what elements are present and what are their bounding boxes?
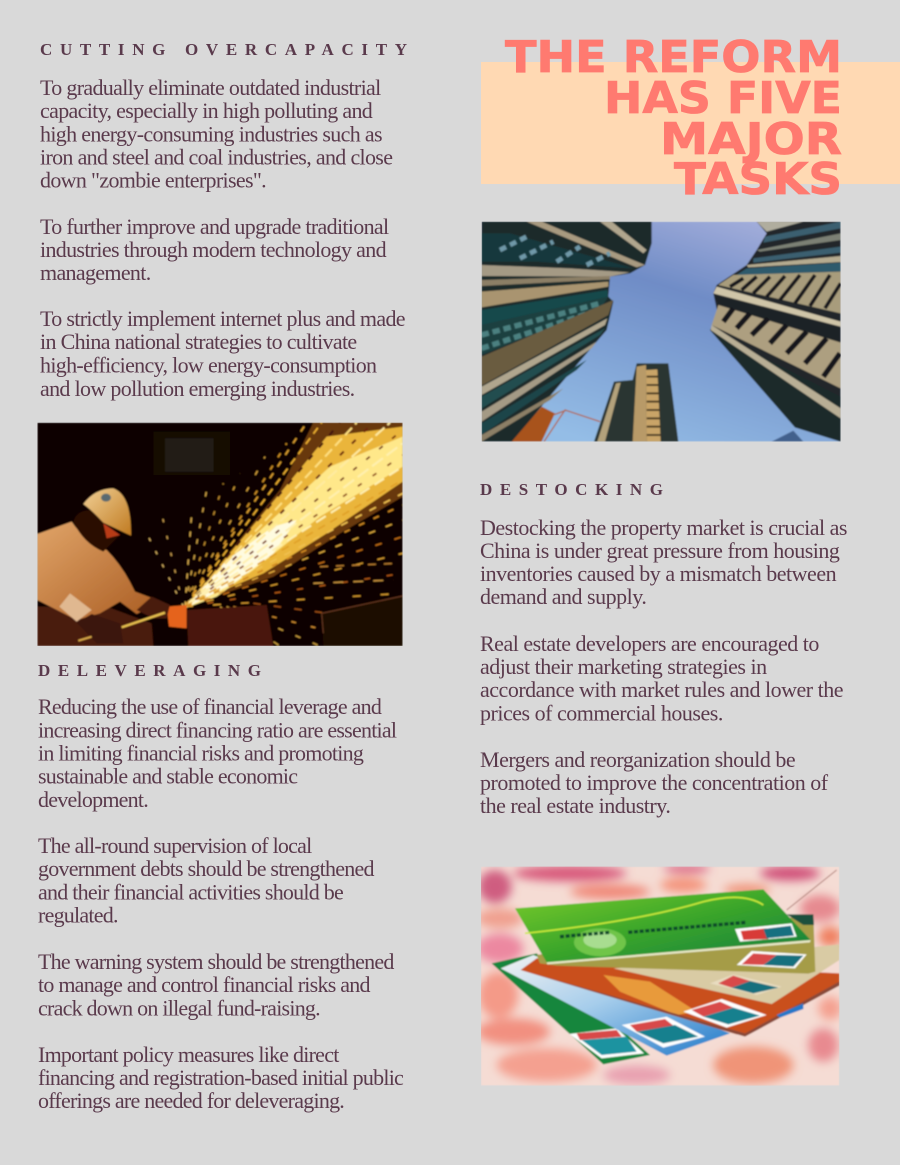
heading: cutting overcapacity: CUTTING OVERCAPACITY: [40, 40, 407, 59]
photo: bank cards on banknotes: [477, 865, 842, 1086]
text block: deleveraging: and their financial activities should be: [38, 880, 343, 904]
text block: deleveraging: regulated.: [38, 902, 118, 928]
text block: deleveraging: The warning system should be strengthened: [38, 949, 394, 974]
text block: cutting overcapacity: high energy-consuming industries such as: [40, 122, 382, 146]
text block: destocking: promoted to improve the concentration of: [480, 770, 829, 795]
text block: destocking: demand and supply.: [480, 584, 646, 609]
worker: [37, 488, 170, 646]
text block: cutting overcapacity: in China national strategies to cultivate: [40, 329, 356, 354]
photo: towers from below: [482, 222, 841, 442]
text block: deleveraging: financing and registration-based initial public: [38, 1065, 404, 1090]
text block: deleveraging: Reducing the use of financial leverage and: [38, 694, 382, 719]
text block: destocking: prices of commercial houses.: [480, 700, 723, 726]
text block: destocking: China is under great pressure from housing: [480, 538, 840, 563]
green card: [492, 953, 650, 1064]
text block: cutting overcapacity: To strictly implement internet plus and made: [40, 306, 405, 331]
text block: deleveraging: development.: [38, 787, 148, 812]
text block: cutting overcapacity: down "zombie enterprises".: [40, 168, 266, 192]
text block: deleveraging: [38, 694, 404, 1113]
photo: worker with sparks: [37, 423, 403, 646]
section: destocking: [480, 480, 847, 818]
text block: cutting overcapacity: To gradually eliminate outdated industrial: [40, 75, 381, 100]
left towers: [482, 222, 652, 442]
text block: deleveraging: sustainable and stable economic: [38, 764, 298, 788]
title text: [505, 32, 842, 205]
text block: destocking: [480, 515, 847, 818]
text block: deleveraging: The all-round supervision of local: [38, 833, 312, 858]
beige card: [613, 944, 839, 1004]
banner rectangle: [481, 62, 900, 184]
text block: destocking: accordance with market rules and lower the: [480, 677, 843, 702]
red card: [521, 958, 839, 1037]
title text: THE REFORM: [505, 32, 842, 83]
text block: deleveraging: Important policy measures like direct: [38, 1042, 339, 1067]
sparks fan: [147, 423, 403, 646]
heading: deleveraging: DELEVERAGING: [38, 661, 261, 680]
text block: deleveraging: to manage and control financial risks and: [38, 972, 370, 997]
text block: cutting overcapacity: capacity, especially in high polluting and: [40, 98, 373, 123]
heading: destocking: DESTOCKING: [480, 480, 663, 499]
text block: destocking: inventories caused by a mismatch between: [480, 561, 837, 586]
text block: cutting overcapacity: high-efficiency, low energy-consumption: [40, 352, 377, 378]
title text: TASKS: [674, 154, 842, 205]
cards: [492, 889, 839, 1064]
text block: cutting overcapacity: and low pollution emerging industries.: [40, 376, 355, 401]
text block: destocking: the real estate industry.: [480, 793, 670, 818]
text block: destocking: adjust their marketing strategies in: [480, 654, 767, 679]
text block: cutting overcapacity: [40, 75, 405, 401]
top green card: [515, 889, 811, 964]
text block: cutting overcapacity: iron and steel and coal industries, and close: [40, 144, 392, 170]
text block: deleveraging: crack down on illegal fund-raising.: [38, 996, 320, 1020]
centre tower: [594, 363, 678, 442]
text block: cutting overcapacity: industries through modern technology and: [40, 237, 387, 262]
title banner: [481, 32, 900, 205]
text block: cutting overcapacity: management.: [40, 260, 151, 285]
title text: HAS FIVE: [604, 73, 842, 124]
text block: destocking: Mergers and reorganization should be: [480, 747, 795, 772]
text block: deleveraging: in limiting financial risks and promoting: [38, 740, 364, 766]
text block: deleveraging: increasing direct financing ratio are essential: [38, 718, 397, 742]
section: cutting overcapacity: [40, 40, 407, 401]
title text: MAJOR: [660, 114, 842, 165]
section: deleveraging: [38, 661, 404, 1113]
text block: deleveraging: government debts should be strengthened: [38, 856, 374, 881]
olive card: [537, 914, 815, 974]
text block: cutting overcapacity: To further improve and upgrade traditional: [40, 214, 389, 239]
blue card: [501, 955, 730, 1056]
text block: destocking: Real estate developers are encouraged to: [480, 631, 819, 656]
text block: destocking: Destocking the property market is crucial as: [480, 515, 847, 540]
block being cut: [187, 605, 273, 646]
right towers: [710, 222, 841, 442]
text block: deleveraging: offerings are needed for deleveraging.: [38, 1088, 344, 1113]
banknotes background: [477, 865, 842, 1084]
crane: [544, 410, 600, 442]
